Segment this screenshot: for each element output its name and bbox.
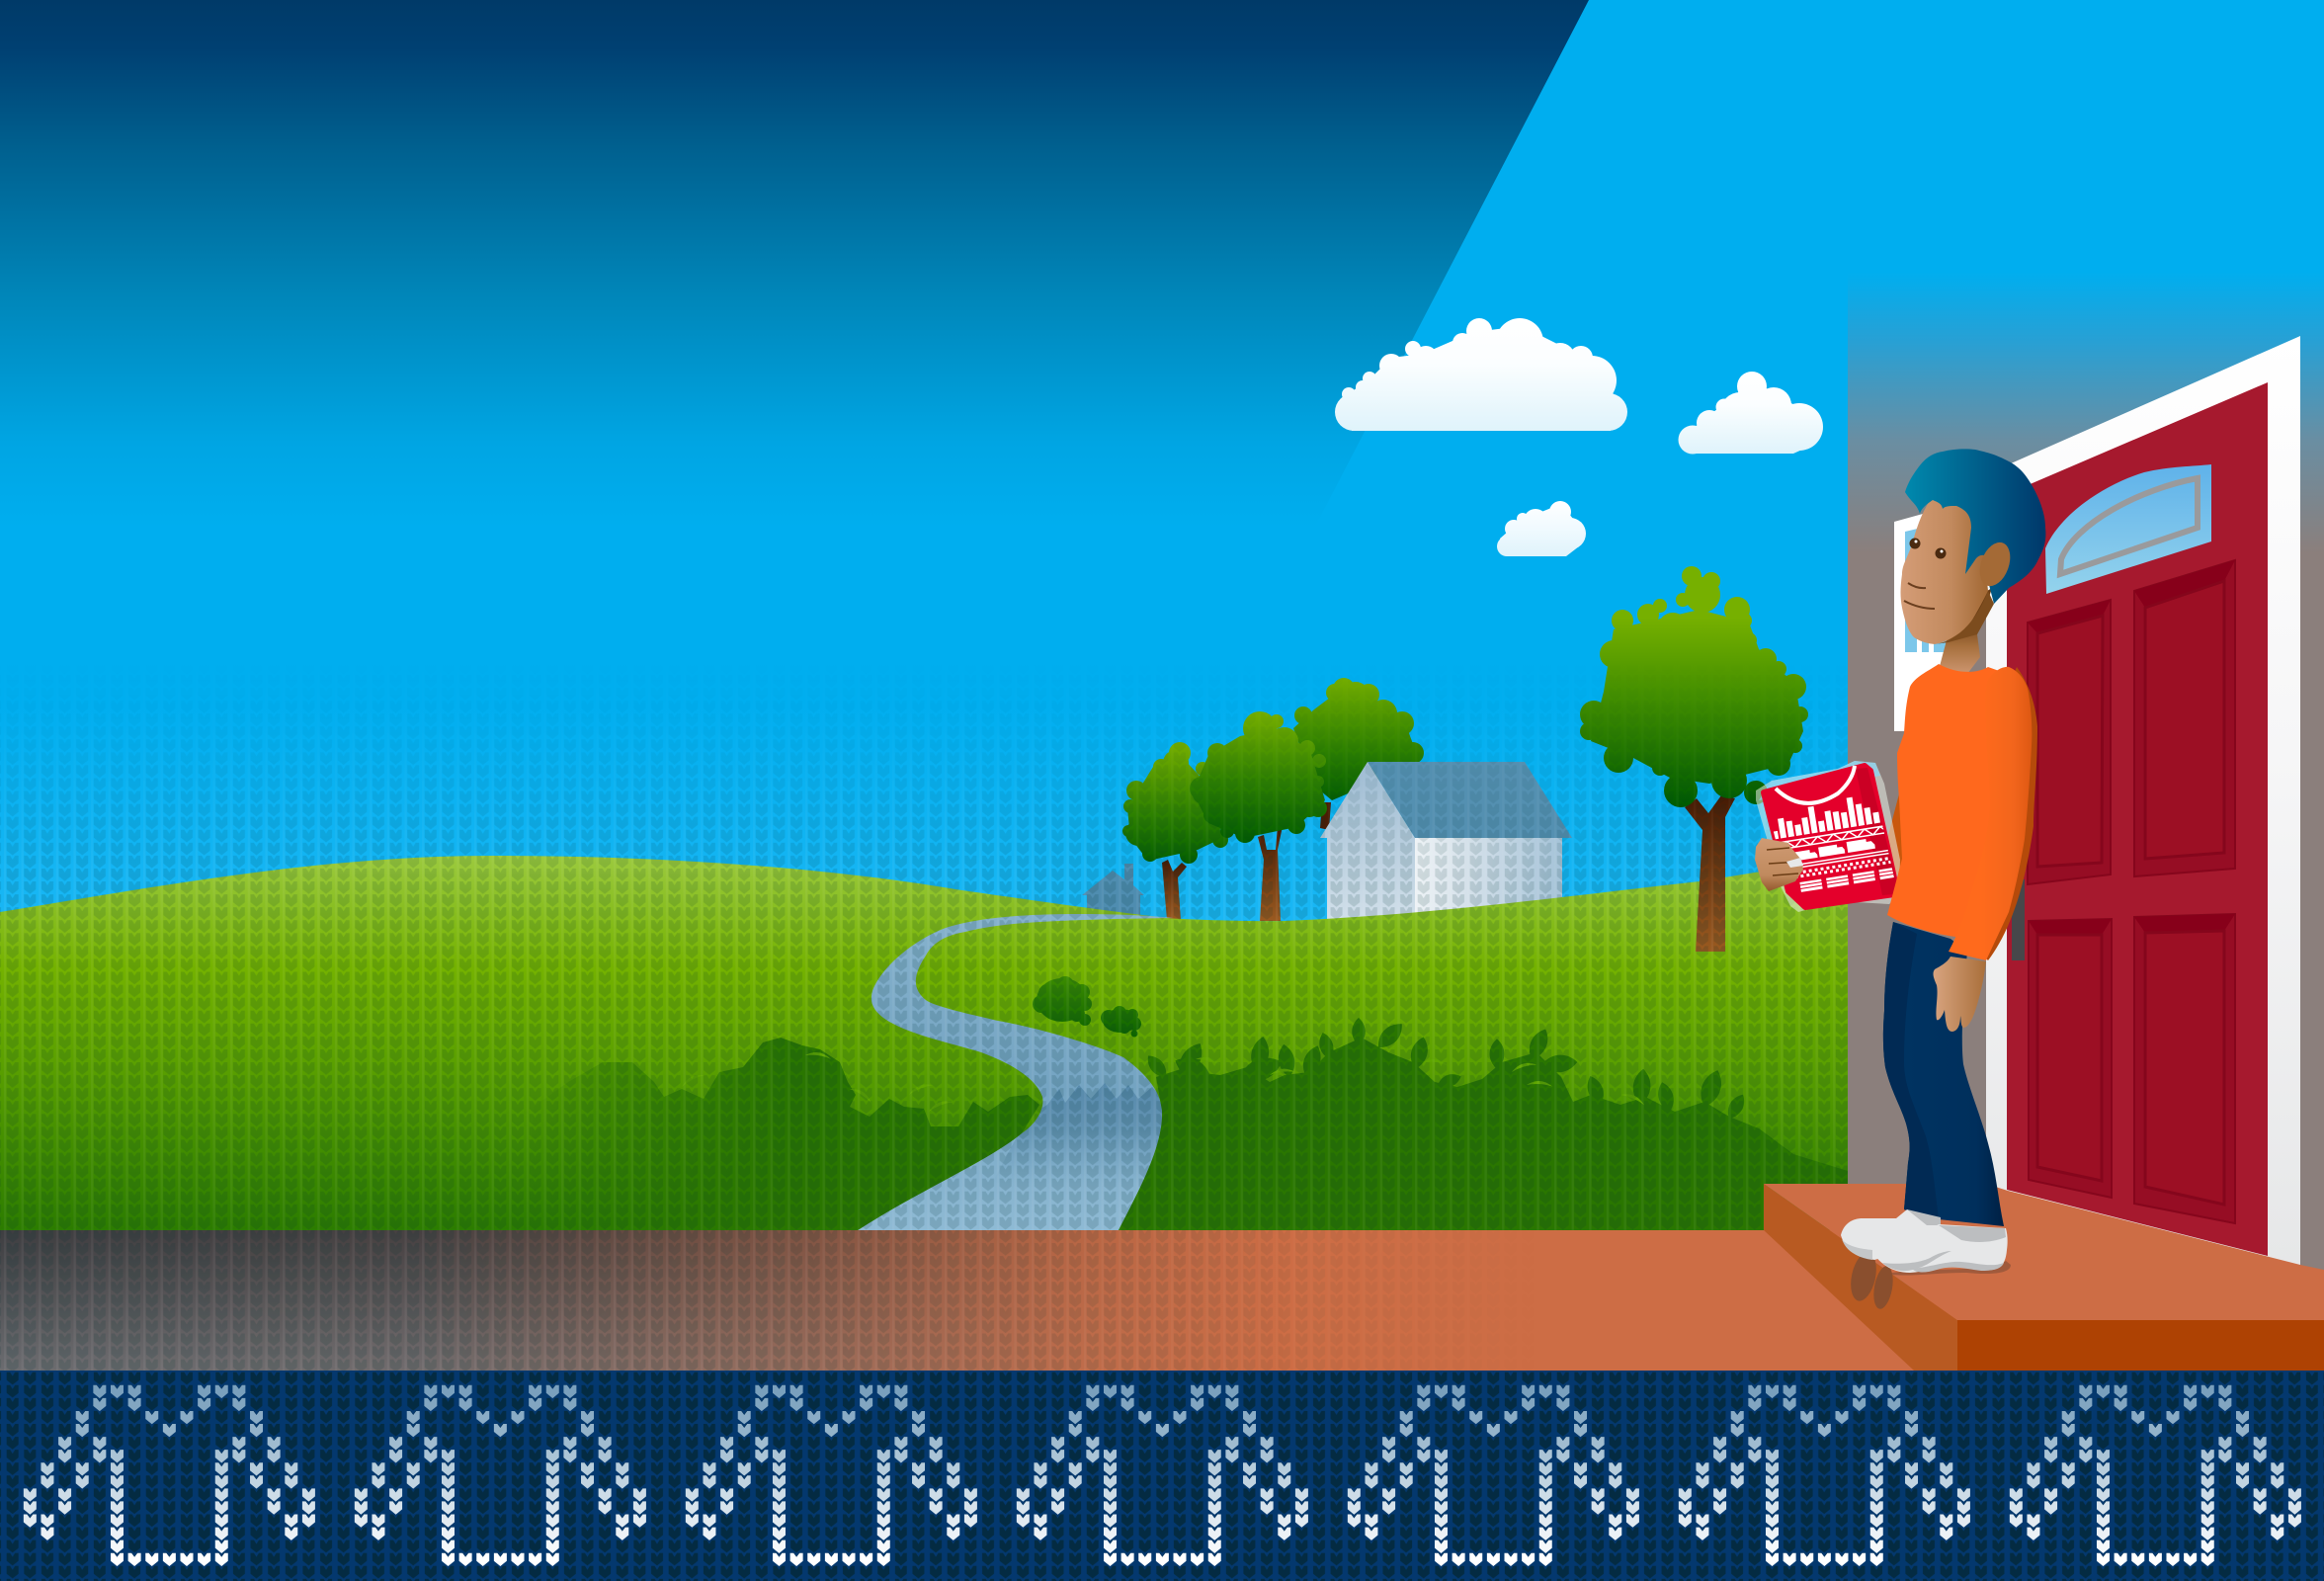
house (1320, 762, 1572, 927)
porch step (1764, 1184, 2324, 1371)
knit texture over landscape (0, 739, 1848, 1230)
eyes (1909, 538, 1947, 559)
holding hand (1755, 838, 1803, 891)
front hill (1028, 858, 1848, 1245)
product bag (1756, 761, 1909, 912)
bush leaf notches (680, 1049, 1646, 1112)
door frame (1986, 336, 2300, 1266)
neck (1939, 588, 1992, 674)
sky background (0, 0, 2324, 988)
pants (1883, 922, 2004, 1226)
knit bottom band (0, 1371, 2324, 1581)
dark night sky wedge (0, 0, 1589, 527)
winding road (858, 914, 1173, 1230)
nose and mouth (1904, 583, 1935, 609)
ear (1974, 539, 2016, 590)
back hill (0, 856, 1176, 1245)
hair (1905, 449, 2045, 604)
sweater motif row (24, 1385, 2301, 1566)
cloud: large (1335, 318, 1627, 431)
grass tufts reflected on road (1007, 1083, 1162, 1162)
foreground bushes: left (524, 1017, 1046, 1230)
house wall (1848, 272, 2324, 1290)
small shrub one (1033, 976, 1092, 1026)
knit texture over floor (0, 1230, 1390, 1371)
floor base (0, 1230, 1966, 1371)
head (1901, 449, 2045, 644)
door (2007, 382, 2268, 1256)
tree: behind house (1293, 678, 1424, 830)
person (1755, 449, 2045, 1273)
tree: center (1190, 711, 1327, 921)
tree: small left (1122, 742, 1228, 920)
knit stitch rows (0, 1372, 2324, 1581)
cloud: small (1497, 501, 1586, 556)
door panel top-right (2134, 560, 2235, 876)
back forearm (1887, 783, 1912, 878)
door fanlight window (2045, 464, 2211, 594)
face (1901, 489, 1988, 644)
door panel bottom-right (2134, 914, 2235, 1223)
shoes (1841, 1209, 2008, 1273)
large tree (1580, 566, 1808, 952)
door handle (2012, 879, 2025, 960)
shirt (1887, 664, 2037, 960)
jaw shadow (1935, 591, 1994, 644)
distant house (1082, 864, 1144, 919)
floor grey fade (0, 1230, 1285, 1371)
hanging hand (1934, 957, 1986, 1032)
foreground bushes: right (1119, 1018, 1848, 1230)
cloud: medium (1678, 372, 1823, 455)
shoe shadows (1847, 1250, 2011, 1310)
side window (1894, 506, 1951, 731)
door panel top-left (2028, 600, 2111, 884)
small shrub two (1101, 1006, 1141, 1038)
door panel bottom-left (2029, 919, 2112, 1198)
